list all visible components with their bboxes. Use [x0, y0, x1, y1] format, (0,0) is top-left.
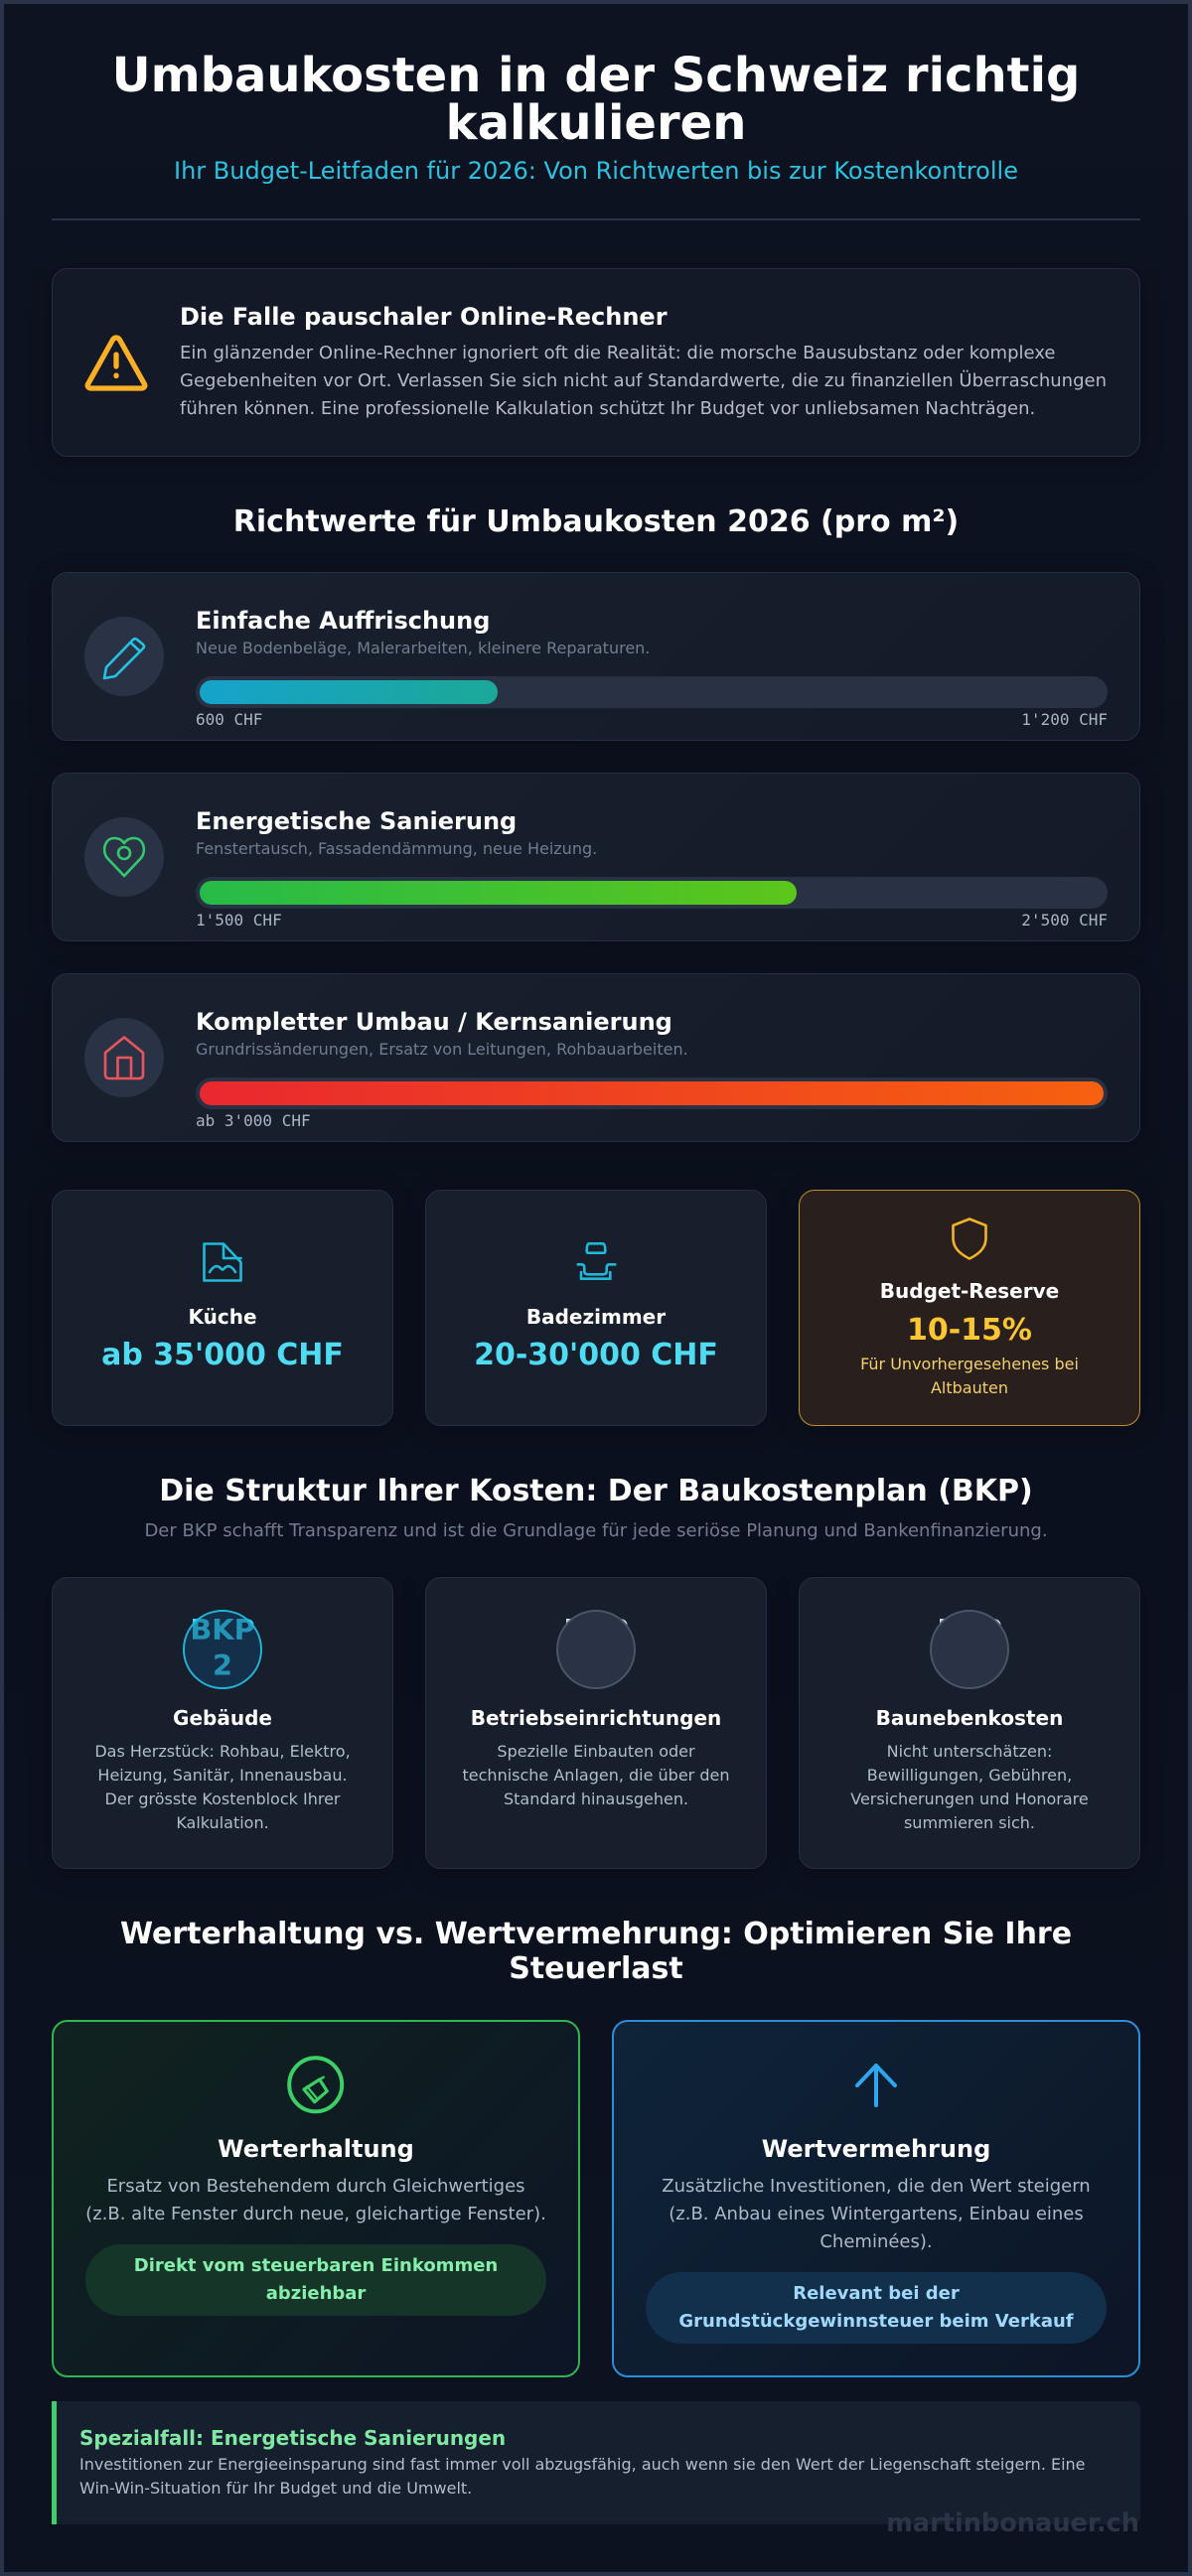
tier 2 bar: [196, 877, 1108, 909]
Wertvermehrung pill: Grundstückgewinnsteuer beim Verkauf: [678, 2311, 1074, 2332]
tier 1 description: Neue Bodenbeläge, Malerarbeiten, kleinere Reparaturen.: [196, 639, 650, 657]
BKP 2 badge circle: [183, 1610, 262, 1689]
kitchen label: Küche: [188, 1305, 257, 1329]
heading: Werterhaltung vs. Wertvermehrung: Steuerlast: [509, 1951, 683, 1986]
Werterhaltung text: (z.B. alte Fenster durch neue, gleichartige Fenster).: [85, 2204, 546, 2224]
reserve label: Budget-Reserve: [880, 1279, 1059, 1303]
BKP 2 badge text: [190, 1613, 255, 1682]
Werterhaltung text: Ersatz von Bestehendem durch Gleichwertiges: [106, 2176, 525, 2197]
panel: budget reserve: [799, 1190, 1140, 1426]
icon: Werterhaltung tag: [287, 2056, 344, 2113]
Baunebenkosten title: Baunebenkosten: [876, 1706, 1063, 1730]
Baunebenkosten text: Bewilligungen, Gebühren,: [867, 1766, 1072, 1785]
title: kalkulieren: [446, 95, 746, 151]
Werterhaltung text: [85, 2176, 546, 2224]
panel: Werterhaltung: [52, 2020, 580, 2377]
callout title: Spezialfall: Energetische Sanierungen: [79, 2426, 506, 2450]
Baunebenkosten text: Versicherungen und Honorare: [850, 1789, 1089, 1808]
BKP 5 badge text: BKP: [937, 1613, 1002, 1646]
warning text: Ein glänzender Online-Rechner ignoriert oft die Realität: die morsche Bausubstanz oder komplexe: [180, 343, 1055, 363]
BKP 3 badge text: [563, 1613, 629, 1682]
reserve note: Altbauten: [931, 1378, 1008, 1397]
panel: tier 3: [52, 973, 1140, 1142]
tier 2 max: 2'500 CHF: [1021, 911, 1108, 930]
warning heading: Die Falle pauschaler Online-Rechner: [180, 303, 668, 331]
Wertvermehrung title: Wertvermehrung: [762, 2135, 990, 2163]
Werterhaltung pill: abziehbar: [266, 2283, 366, 2304]
Wertvermehrung pill: Relevant bei der: [793, 2283, 960, 2304]
tier 2 min: 1'500 CHF: [196, 911, 282, 930]
Betriebseinrichtungen text: [463, 1742, 729, 1808]
Gebäude title: Gebäude: [173, 1706, 272, 1730]
reserve note: [860, 1355, 1079, 1397]
BKP 5 badge text: 5: [960, 1648, 979, 1682]
BKP 5 badge text: [937, 1613, 1002, 1682]
reserve value: 10-15%: [907, 1313, 1032, 1348]
reserve note: Für Unvorhergesehenes bei: [860, 1355, 1079, 1373]
heading: Richtwerte: Richtwerte für Umbaukosten 2026 (pro m²): [233, 504, 959, 539]
bathroom value: 20-30'000 CHF: [474, 1338, 718, 1372]
panel: Betriebseinrichtungen: [425, 1577, 767, 1869]
BKP 3 badge text: 3: [586, 1648, 606, 1682]
warning text: [180, 343, 1107, 419]
tier 1 max: 1'200 CHF: [1021, 710, 1108, 729]
Werterhaltung title: Werterhaltung: [218, 2135, 414, 2163]
icon: heart circle: [84, 817, 164, 897]
tier 3 min: ab 3'000 CHF: [196, 1111, 311, 1130]
icon: heart: [103, 836, 145, 878]
panel: warning: [52, 268, 1140, 457]
panel: kitchen: [52, 1190, 393, 1426]
title: [112, 48, 1080, 151]
Baunebenkosten text: [850, 1742, 1089, 1832]
tier 2 title: Energetische Sanierung: [196, 807, 517, 835]
panel: tier 2: [52, 773, 1140, 941]
watermark: martinbonauer.ch: [886, 2508, 1139, 2538]
BKP 3 badge text: BKP: [563, 1613, 629, 1646]
Wertvermehrung text: [662, 2176, 1091, 2252]
subtitle: Ihr Budget-Leitfaden für 2026: Von Richtwerten bis zur Kostenkontrolle: [174, 157, 1018, 185]
panel: tier 1: [52, 572, 1140, 741]
panel: Gebäude: [52, 1577, 393, 1869]
icon: pencil circle: [84, 617, 164, 696]
Werterhaltung pill: Direkt vom steuerbaren Einkommen: [134, 2255, 498, 2276]
panel: Wertvermehrung: [612, 2020, 1140, 2377]
panel: Baunebenkosten: [799, 1577, 1140, 1869]
panel: bathroom: [425, 1190, 767, 1426]
tier 1 title: Einfache Auffrischung: [196, 607, 490, 635]
Gebäude text: Der grösste Kostenblock Ihrer: [105, 1789, 340, 1808]
Baunebenkosten text: Nicht unterschätzen:: [887, 1742, 1052, 1761]
Wertvermehrung pill: [646, 2272, 1107, 2344]
Betriebseinrichtungen text: Standard hinausgehen.: [504, 1789, 688, 1808]
tier 2 description: Fenstertausch, Fassadendämmung, neue Heizung.: [196, 839, 597, 858]
tier 3 bar: [196, 1077, 1108, 1109]
Betriebseinrichtungen text: Spezielle Einbauten oder: [497, 1742, 695, 1761]
icon: kitchen document: [203, 1242, 242, 1282]
BKP subtitle: Der BKP schafft Transparenz und ist die Grundlage für jede seriöse Planung und Bankenfinanzierung.: [144, 1520, 1048, 1541]
icon: house circle: [84, 1018, 164, 1097]
heading: Werterhaltung vs. Wertvermehrung: [120, 1917, 1072, 1986]
tier 1 bar: [196, 676, 1108, 708]
icon: bathroom: [576, 1242, 617, 1280]
icon: house: [103, 1036, 145, 1080]
title: Umbaukosten in der Schweiz richtig: [112, 48, 1080, 103]
BKP 5 badge circle: [930, 1610, 1009, 1689]
Wertvermehrung text: (z.B. Anbau eines Wintergartens, Einbau eines: [669, 2204, 1084, 2224]
tier 1 min: 600 CHF: [196, 710, 262, 729]
Gebäude text: Heizung, Sanitär, Innenausbau.: [97, 1766, 348, 1785]
warning text: Gegebenheiten vor Ort. Verlassen Sie sich nicht auf Standardwerte, die zu finanziellen Überraschungen: [180, 370, 1107, 391]
BKP 2 badge text: 2: [213, 1648, 232, 1682]
Gebäude text: Kalkulation.: [176, 1813, 269, 1832]
BKP 3 badge circle: [556, 1610, 636, 1689]
icon: warning triangle: [85, 335, 147, 391]
heading: BKP: Die Struktur Ihrer Kosten: Der Baukostenplan (BKP): [159, 1474, 1033, 1508]
callout: Spezialfall: [52, 2401, 1140, 2524]
BKP 2 badge text: BKP: [190, 1613, 255, 1646]
Gebäude text: Das Herzstück: Rohbau, Elektro,: [94, 1742, 351, 1761]
Wertvermehrung text: Zusätzliche Investitionen, die den Wert steigern: [662, 2176, 1091, 2197]
tier 3 description: Grundrissänderungen, Ersatz von Leitungen, Rohbauarbeiten.: [196, 1040, 688, 1059]
callout text: [79, 2455, 1086, 2498]
icon: shield: [952, 1217, 987, 1260]
callout text: Win-Win-Situation für Ihr Budget und die Umwelt.: [79, 2479, 472, 2498]
Werterhaltung pill: [85, 2244, 546, 2316]
Gebäude text: [94, 1742, 351, 1832]
warning text: führen können. Eine professionelle Kalkulation schützt Ihr Budget vor unliebsamen Nachträgen.: [180, 398, 1035, 419]
kitchen value: ab 35'000 CHF: [101, 1338, 344, 1372]
Betriebseinrichtungen text: technische Anlagen, die über den: [463, 1766, 729, 1785]
Baunebenkosten text: summieren sich.: [904, 1813, 1035, 1832]
icon: pencil: [103, 638, 145, 679]
Wertvermehrung text: Cheminées).: [820, 2231, 933, 2252]
bathroom label: Badezimmer: [526, 1305, 666, 1329]
icon: arrow up: [854, 2064, 898, 2107]
tier 3 title: Kompletter Umbau / Kernsanierung: [196, 1008, 672, 1036]
heading: Werterhaltung vs. Wertvermehrung: Werterhaltung vs. Wertvermehrung: Optimieren Sie Ihre: [120, 1917, 1072, 1951]
Betriebseinrichtungen title: Betriebseinrichtungen: [471, 1706, 721, 1730]
callout text: Investitionen zur Energieeinsparung sind fast immer voll abzugsfähig, auch wenn sie den Wert der Liegenschaft steigern. Eine: [79, 2455, 1086, 2474]
